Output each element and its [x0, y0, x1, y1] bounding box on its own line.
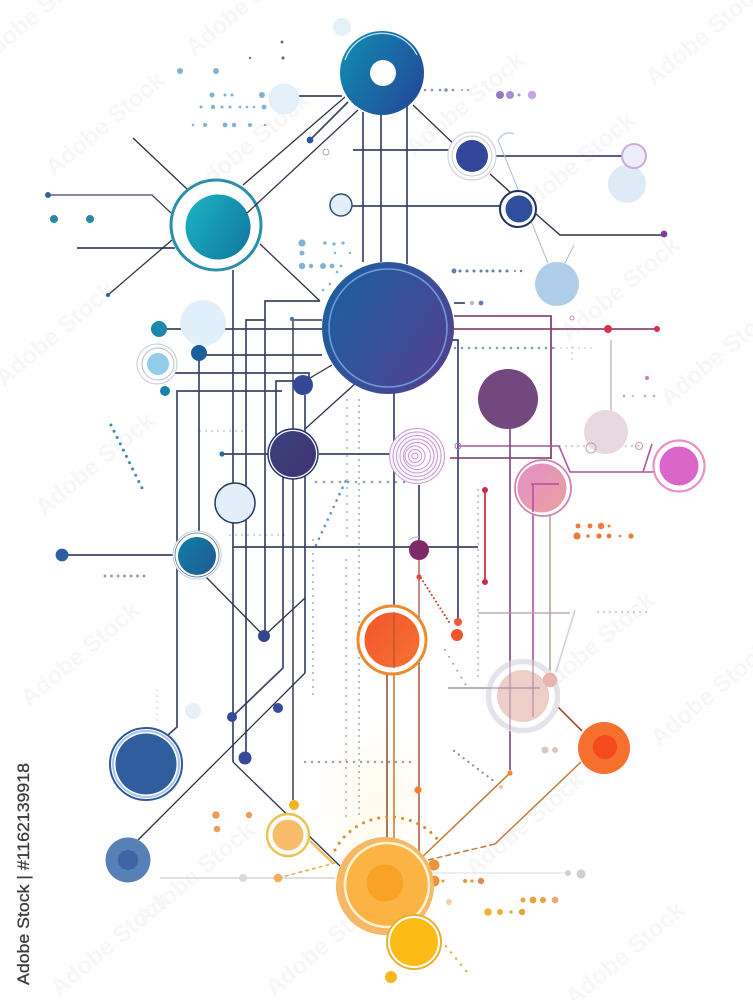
node: dark indigo circle [268, 429, 318, 479]
small blue and teal terminal nodes [45, 137, 667, 765]
dot clusters [105, 40, 655, 916]
node: pale blue outlined circle [215, 483, 255, 523]
node: main blue hub [322, 262, 454, 394]
node: plum circle [478, 369, 538, 429]
dots: yellow rows [484, 897, 558, 916]
node: steel blue circle [106, 838, 150, 882]
node: large yellow hub [336, 837, 434, 935]
dots: sparse near pale circle [623, 376, 655, 397]
connector lines: purple and pink network [448, 316, 658, 770]
dots: row beside main hub [452, 268, 522, 305]
dots: pale rosy pair [542, 746, 558, 754]
vertical stock credit: Adobe Stock | #1162139918 [14, 763, 33, 985]
warm glow above yellow hub [315, 720, 435, 880]
dots: right of yellow hub [407, 860, 484, 911]
node: lilac spiral circle [390, 428, 444, 484]
watermark pattern: Adobe Stock [555, 231, 686, 347]
connector lines: orange and yellow network [160, 560, 582, 972]
node: small amber ringed circle [267, 814, 309, 856]
watermark pattern: Adobe Stock [40, 66, 171, 182]
dots: grey terminal pair [565, 869, 586, 879]
watermark pattern: Adobe Stock [400, 46, 531, 162]
dots: top left blue [177, 68, 266, 127]
dots: cluster above main hub [298, 239, 351, 291]
watermark pattern: Adobe Stock [130, 816, 261, 932]
node: rosy junction dot [543, 673, 557, 687]
node: yellow small dot [385, 971, 397, 983]
watermark pattern: Adobe Stock [15, 596, 146, 712]
watermark pattern: Adobe Stock [185, 86, 316, 202]
watermark pattern: Adobe Stock [530, 586, 661, 702]
node: teal hub [171, 180, 261, 270]
node: orange junction dots [239, 770, 513, 882]
pale background circles [180, 18, 646, 719]
watermark pattern: Adobe Stock [30, 406, 161, 522]
watermark pattern: Adobe Stock [510, 106, 641, 222]
dots: tan row left [105, 574, 146, 578]
node: lilac outlined circle [622, 144, 646, 168]
dots: left of yellow node [212, 811, 252, 832]
node: pale outlined circle top [330, 194, 352, 216]
dots: purple trio [496, 91, 536, 99]
dots: orange rows [573, 523, 634, 540]
small outlined markers on pink line [323, 149, 642, 453]
node: magenta circle [654, 440, 704, 492]
node: peach ringed circle [448, 660, 558, 730]
dots: blue diagonal on left [111, 425, 142, 488]
node: navy circle with rings [448, 132, 496, 180]
dots: top small dark [249, 40, 285, 60]
node: maroon small circle [409, 537, 429, 560]
node: bright yellow circle [387, 915, 441, 969]
node: concentric light blue [137, 344, 177, 384]
node: blue ringed circle left [110, 728, 182, 800]
dotted background lines [157, 347, 648, 820]
red and pink terminal dots [416, 325, 660, 641]
watermark pattern: Adobe Stock [260, 886, 391, 1000]
node: teal blue ringed circle [173, 531, 221, 579]
node: orange ringed circle [358, 606, 426, 674]
node: navy outlined circle [500, 191, 536, 227]
dots: row right of top hub [424, 88, 469, 92]
node: pink gradient circle [515, 460, 571, 516]
watermark pattern: Adobe Stock [45, 886, 176, 1000]
watermark pattern: Adobe Stock [460, 766, 591, 882]
node: top hub ring [340, 31, 424, 115]
connector lines: blue and teal network [48, 96, 662, 866]
node: orange red circle [578, 722, 630, 774]
